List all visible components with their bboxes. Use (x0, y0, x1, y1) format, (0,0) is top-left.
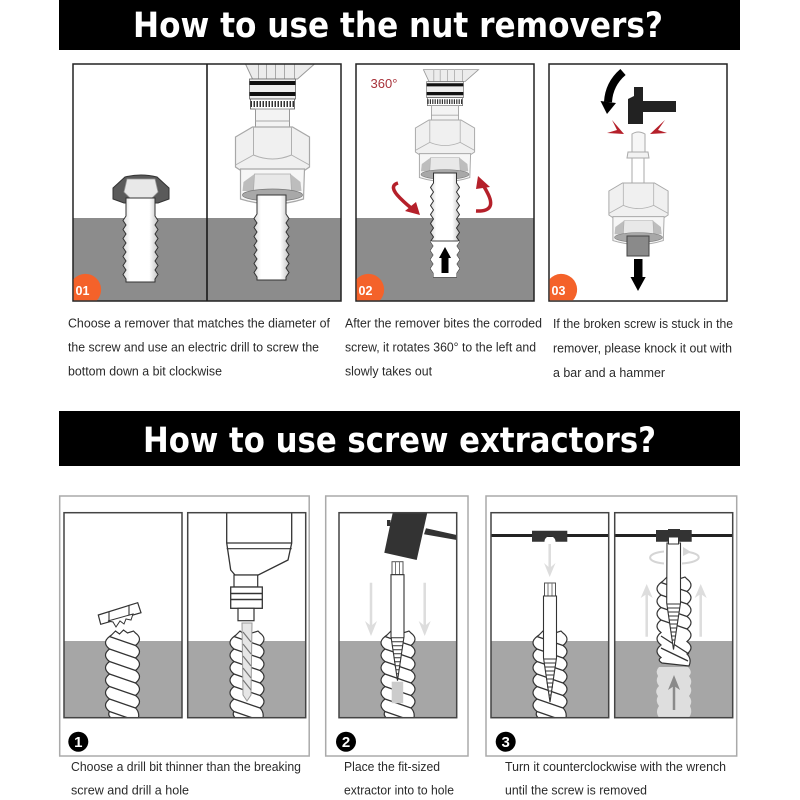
text: extractor step 3 caption: Turn it counterclockwise with the wrench (505, 760, 726, 774)
text: step 01 caption: bottom down a bit clockwise (68, 364, 222, 378)
label: 360 degrees: 360° (370, 76, 397, 91)
sub-panel: drill a hole (188, 513, 306, 718)
text: step 01 caption: Choose a remover that matches the diameter of (68, 316, 331, 330)
text: step 02 caption (345, 316, 542, 378)
text: step 03 caption: a bar and a hammer (553, 366, 665, 380)
icon: drill turning remover (415, 70, 479, 277)
text: extractor step 1 caption: Choose a drill bit thinner than the breaking (71, 760, 301, 774)
badge: step 3: 3 (502, 734, 510, 751)
text: extractor step 1 caption: screw and drill a hole (71, 784, 189, 798)
text: step 02 caption: screw, it rotates 360° to the left and (345, 340, 536, 354)
panel: extractor step 1 (60, 496, 309, 756)
text: step 03 caption: If the broken screw is stuck in the (553, 317, 733, 331)
sub-panel: broken screw (64, 513, 182, 718)
badge: step 2 (336, 732, 356, 752)
panel: step 02 (356, 64, 534, 301)
icon: drill with nut remover on bolt (236, 64, 314, 280)
badge: step 2: 2 (342, 734, 350, 751)
panel: extractor step 2 (326, 496, 468, 756)
badge: step 1 (68, 732, 88, 752)
icon: remover with broken screw (609, 132, 668, 256)
text: step 02 caption: After the remover bites the corroded (345, 316, 542, 330)
text: extractor step 2 caption: Place the fit-sized (344, 760, 440, 774)
badge: 02 (357, 274, 384, 300)
icon: red rotation arrow left (393, 183, 420, 215)
sub-panel: place extractor (339, 513, 457, 718)
text: step 03 caption: remover, please knock it out with (553, 342, 732, 356)
text: step 01 caption (68, 316, 331, 378)
header: nut removers: How to use the nut removers? (133, 6, 663, 46)
icon: gray down arrows (365, 583, 431, 636)
icon: curved black arrow (600, 72, 623, 114)
icon: hammer (628, 87, 676, 124)
icon: bolt in ground (113, 175, 169, 282)
badge: 03 (550, 274, 577, 300)
icon: black up arrow (439, 247, 451, 273)
text: extractor step 3 caption (505, 760, 726, 798)
text: extractor step 2 caption: extractor into to hole (344, 784, 454, 798)
text: step 01 caption: the screw and use an electric drill to screw the (68, 340, 319, 354)
icon: black down arrow (630, 259, 646, 291)
header: screw extractors: How to use screw extractors? (143, 421, 656, 461)
badge: 03: 03 (552, 284, 565, 298)
icon: red impact darts (607, 120, 667, 134)
text: extractor step 2 caption (344, 760, 454, 798)
badge: step 3 (496, 732, 516, 752)
icon: gray up arrows (641, 584, 707, 637)
sub-panel: attach wrench (491, 513, 609, 718)
text: step 03 caption (553, 317, 733, 380)
header: nut removers (59, 0, 740, 50)
badge: 01: 01 (76, 284, 89, 298)
badge: 02: 02 (358, 284, 372, 298)
text: extractor step 3 caption: until the screw is removed (505, 784, 647, 798)
text: step 02 caption: slowly takes out (345, 364, 433, 378)
header: screw extractors (59, 411, 740, 466)
text: extractor step 1 caption (71, 760, 301, 798)
icon: red rotation arrow right (476, 176, 491, 211)
sub-panel: turn counterclockwise (615, 513, 733, 718)
badge: step 1: 1 (74, 734, 82, 751)
panel: step 03 (549, 64, 727, 301)
panel: extractor step 3 (486, 496, 737, 756)
panel: step 01 (73, 64, 341, 301)
icon: gray rotation arrow (650, 547, 699, 564)
badge: 01 (74, 274, 101, 300)
